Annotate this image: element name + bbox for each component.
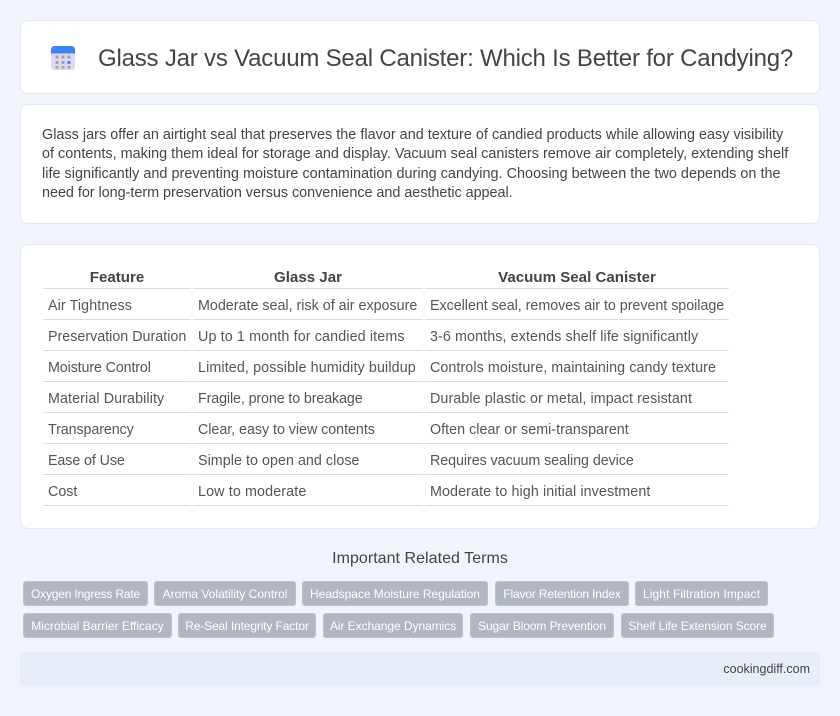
comparison table: Material Durability <box>48 391 164 407</box>
related terms tags: Oxygen Ingress Rate <box>31 587 140 601</box>
intro text: Glass jars offer an airtight seal that preserves the flavor and texture of candied products while allowing easy visibility <box>42 127 783 143</box>
comparison table <box>43 269 729 506</box>
comparison table: Excellent seal, removes air to prevent spoilage <box>430 298 724 314</box>
intro text: need for long-term preservation versus convenience and aesthetic appeal. <box>42 185 513 201</box>
comparison table: Moderate seal, risk of air exposure <box>198 298 417 314</box>
intro text <box>42 127 788 201</box>
comparison table: Low to moderate <box>198 484 306 500</box>
related terms tags: Headspace Moisture Regulation <box>310 587 480 601</box>
comparison table: Ease of Use <box>48 453 125 469</box>
comparison table: Transparency <box>48 422 134 438</box>
related terms tags: Sugar Bloom Prevention <box>478 619 606 633</box>
comparison table: Vacuum Seal Canister <box>498 269 656 286</box>
footer site name: cookingdiff.com <box>723 662 810 676</box>
comparison table: Clear, easy to view contents <box>198 422 375 438</box>
comparison table: Limited, possible humidity buildup <box>198 360 416 376</box>
icon: calendar jar <box>51 46 75 70</box>
comparison table: Simple to open and close <box>198 453 360 469</box>
comparison table: Controls moisture, maintaining candy texture <box>430 360 716 376</box>
related terms tags: Air Exchange Dynamics <box>330 619 456 633</box>
related terms tags: Aroma Volatility Control <box>163 587 287 601</box>
comparison table: 3-6 months, extends shelf life significantly <box>430 329 698 345</box>
related terms tags: Microbial Barrier Efficacy <box>31 619 164 633</box>
comparison table: Preservation Duration <box>48 329 186 345</box>
comparison table: Cost <box>48 484 77 500</box>
comparison table: Glass Jar <box>274 269 342 286</box>
intro text: of contents, making them ideal for storage and display. Vacuum seal canisters remove air completely, extending shelf <box>42 146 788 162</box>
related terms tags: Light Filtration Impact <box>643 587 760 601</box>
related terms tags: Flavor Retention Index <box>503 587 621 601</box>
comparison table: Moderate to high initial investment <box>430 484 650 500</box>
intro panel <box>20 104 820 224</box>
comparison table: Durable plastic or metal, impact resistant <box>430 391 692 407</box>
comparison table: Moisture Control <box>48 360 151 376</box>
header card <box>20 20 820 94</box>
comparison table: Up to 1 month for candied items <box>198 329 405 345</box>
comparison table: Air Tightness <box>48 298 132 314</box>
title: Glass Jar vs Vacuum Seal Canister: Which Is Better for Candying? <box>98 45 793 72</box>
footer bar <box>20 652 820 686</box>
intro text: life significantly and preventing moisture contamination during candying. Choosing between the two depends on the <box>42 166 781 182</box>
related terms tags: Shelf Life Extension Score <box>628 619 767 633</box>
comparison table: Requires vacuum sealing device <box>430 453 634 469</box>
comparison table: Often clear or semi-transparent <box>430 422 629 438</box>
comparison table: Fragile, prone to breakage <box>198 391 363 407</box>
related terms tags <box>23 581 774 638</box>
related terms heading: Important Related Terms <box>332 550 508 567</box>
comparison table: Feature <box>90 269 144 286</box>
table panel <box>20 244 820 529</box>
related terms tags: Re-Seal Integrity Factor <box>185 619 309 633</box>
